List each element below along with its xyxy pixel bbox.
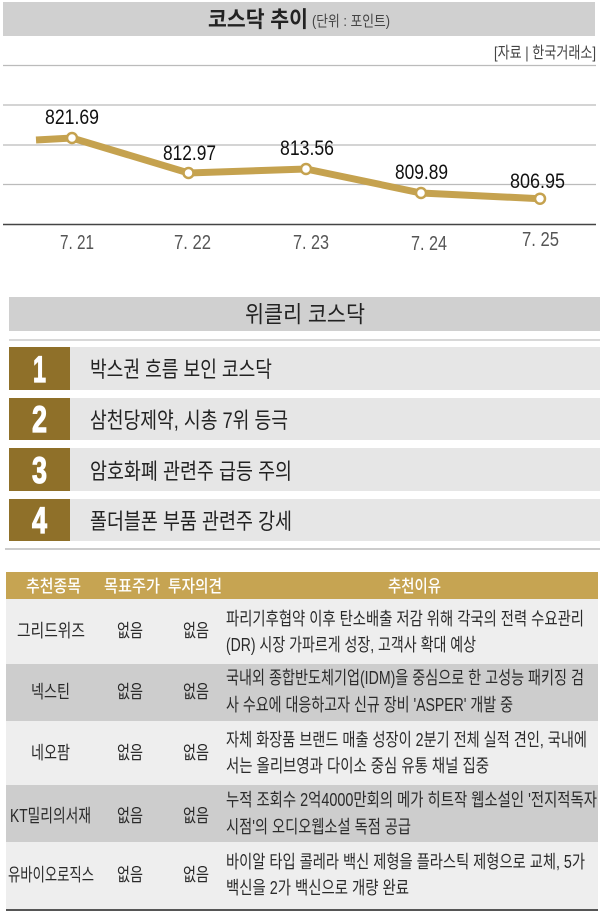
heading bar: KOSDAQ trend: 코스닥 추이 [208,7,308,32]
panel: KOSDAQ trend chart [3,2,596,255]
table header: 추천이유 [388,577,441,596]
line chart: 809.89 [395,161,448,184]
table row: 유바이오로직스: 유바이오로직스 [8,865,94,885]
table row: 네오팜: 없음 [117,743,143,763]
panel: weekly KOSDAQ [5,297,600,549]
list item 3: 암호화폐 관련주 급등 주의 [90,459,292,484]
table row: 넥스틴: 사 수요에 대응하고자 신규 장비 'ASPER' 개발 중 [226,695,513,715]
table row: 유바이오로직스: 없음 [183,865,209,885]
line chart: 7. 23 [293,232,329,254]
table row: 그리드위즈: 없음 [117,621,143,641]
table row: 유바이오로직스 [6,842,598,909]
line chart: 821.69 [45,106,99,129]
line chart: 7. 24 [411,233,447,255]
line chart: 7. 21 [60,232,94,254]
table row: 그리드위즈: 없음 [183,621,209,641]
table header [6,572,598,599]
line chart: 806.95 [510,170,565,193]
list item 1 [9,347,600,390]
table row: 네오팜: 서는 올리브영과 다이소 중심 유통 채널 집중 [226,756,489,776]
table row: KT밀리의서재 [6,785,598,842]
list item 4: 4 [32,500,47,541]
line chart: 813.56 [280,137,334,160]
table row: 넥스틴: 없음 [183,682,209,702]
table row: KT밀리의서재: 시점'의 오디오웹소설 독점 공급 [226,817,411,837]
table header: 추천종목 [26,577,81,596]
line chart: 812.97 [163,142,216,165]
list item 2: 삼천당제약, 시총 7위 등극 [90,408,288,433]
table row: KT밀리의서재: KT밀리의서재 [10,806,91,826]
list item 3: 3 [32,450,47,491]
table row: 유바이오로직스: 없음 [117,865,143,885]
table row: KT밀리의서재: 없음 [183,806,209,826]
list item 3 [9,448,600,491]
line chart [3,66,596,255]
table header: 목표주가 [104,577,160,596]
table row: 그리드위즈: (DR) 시장 가파르게 성장, 고객사 확대 예상 [226,635,476,655]
table header: 투자의견 [168,577,222,596]
table row: KT밀리의서재: 없음 [117,806,143,826]
list item 1: 1 [33,349,46,390]
table row: 유바이오로직스: 백신을 2가 백신으로 개량 완료 [226,878,409,898]
table row: 네오팜: 네오팜 [31,743,70,763]
list item 2: 2 [32,399,47,440]
list item 4: 폴더블폰 부품 관련주 강세 [90,509,292,534]
table row: 넥스틴: 넥스틴 [31,682,70,702]
table row: 넥스틴 [6,664,598,721]
table row: 넥스틴: 없음 [117,682,143,702]
table row: 네오팜: 없음 [183,743,209,763]
heading bar: KOSDAQ trend [3,2,595,36]
list item 4 [9,499,600,541]
list item 1: 박스권 흐름 보인 코스닥 [90,357,272,382]
heading bar: KOSDAQ trend: (단위 : 포인트) [312,13,390,30]
table row: 그리드위즈: 그리드위즈 [17,621,85,641]
line chart: 7. 22 [174,232,211,254]
table row: 그리드위즈 [6,599,598,664]
line chart: 7. 25 [522,229,559,251]
table: recommended stocks [6,572,598,911]
list item 2 [9,398,600,440]
heading bar: weekly KOSDAQ [9,297,600,331]
table row: 네오팜 [6,721,598,785]
heading bar: weekly KOSDAQ: 위클리 코스닥 [245,301,365,327]
